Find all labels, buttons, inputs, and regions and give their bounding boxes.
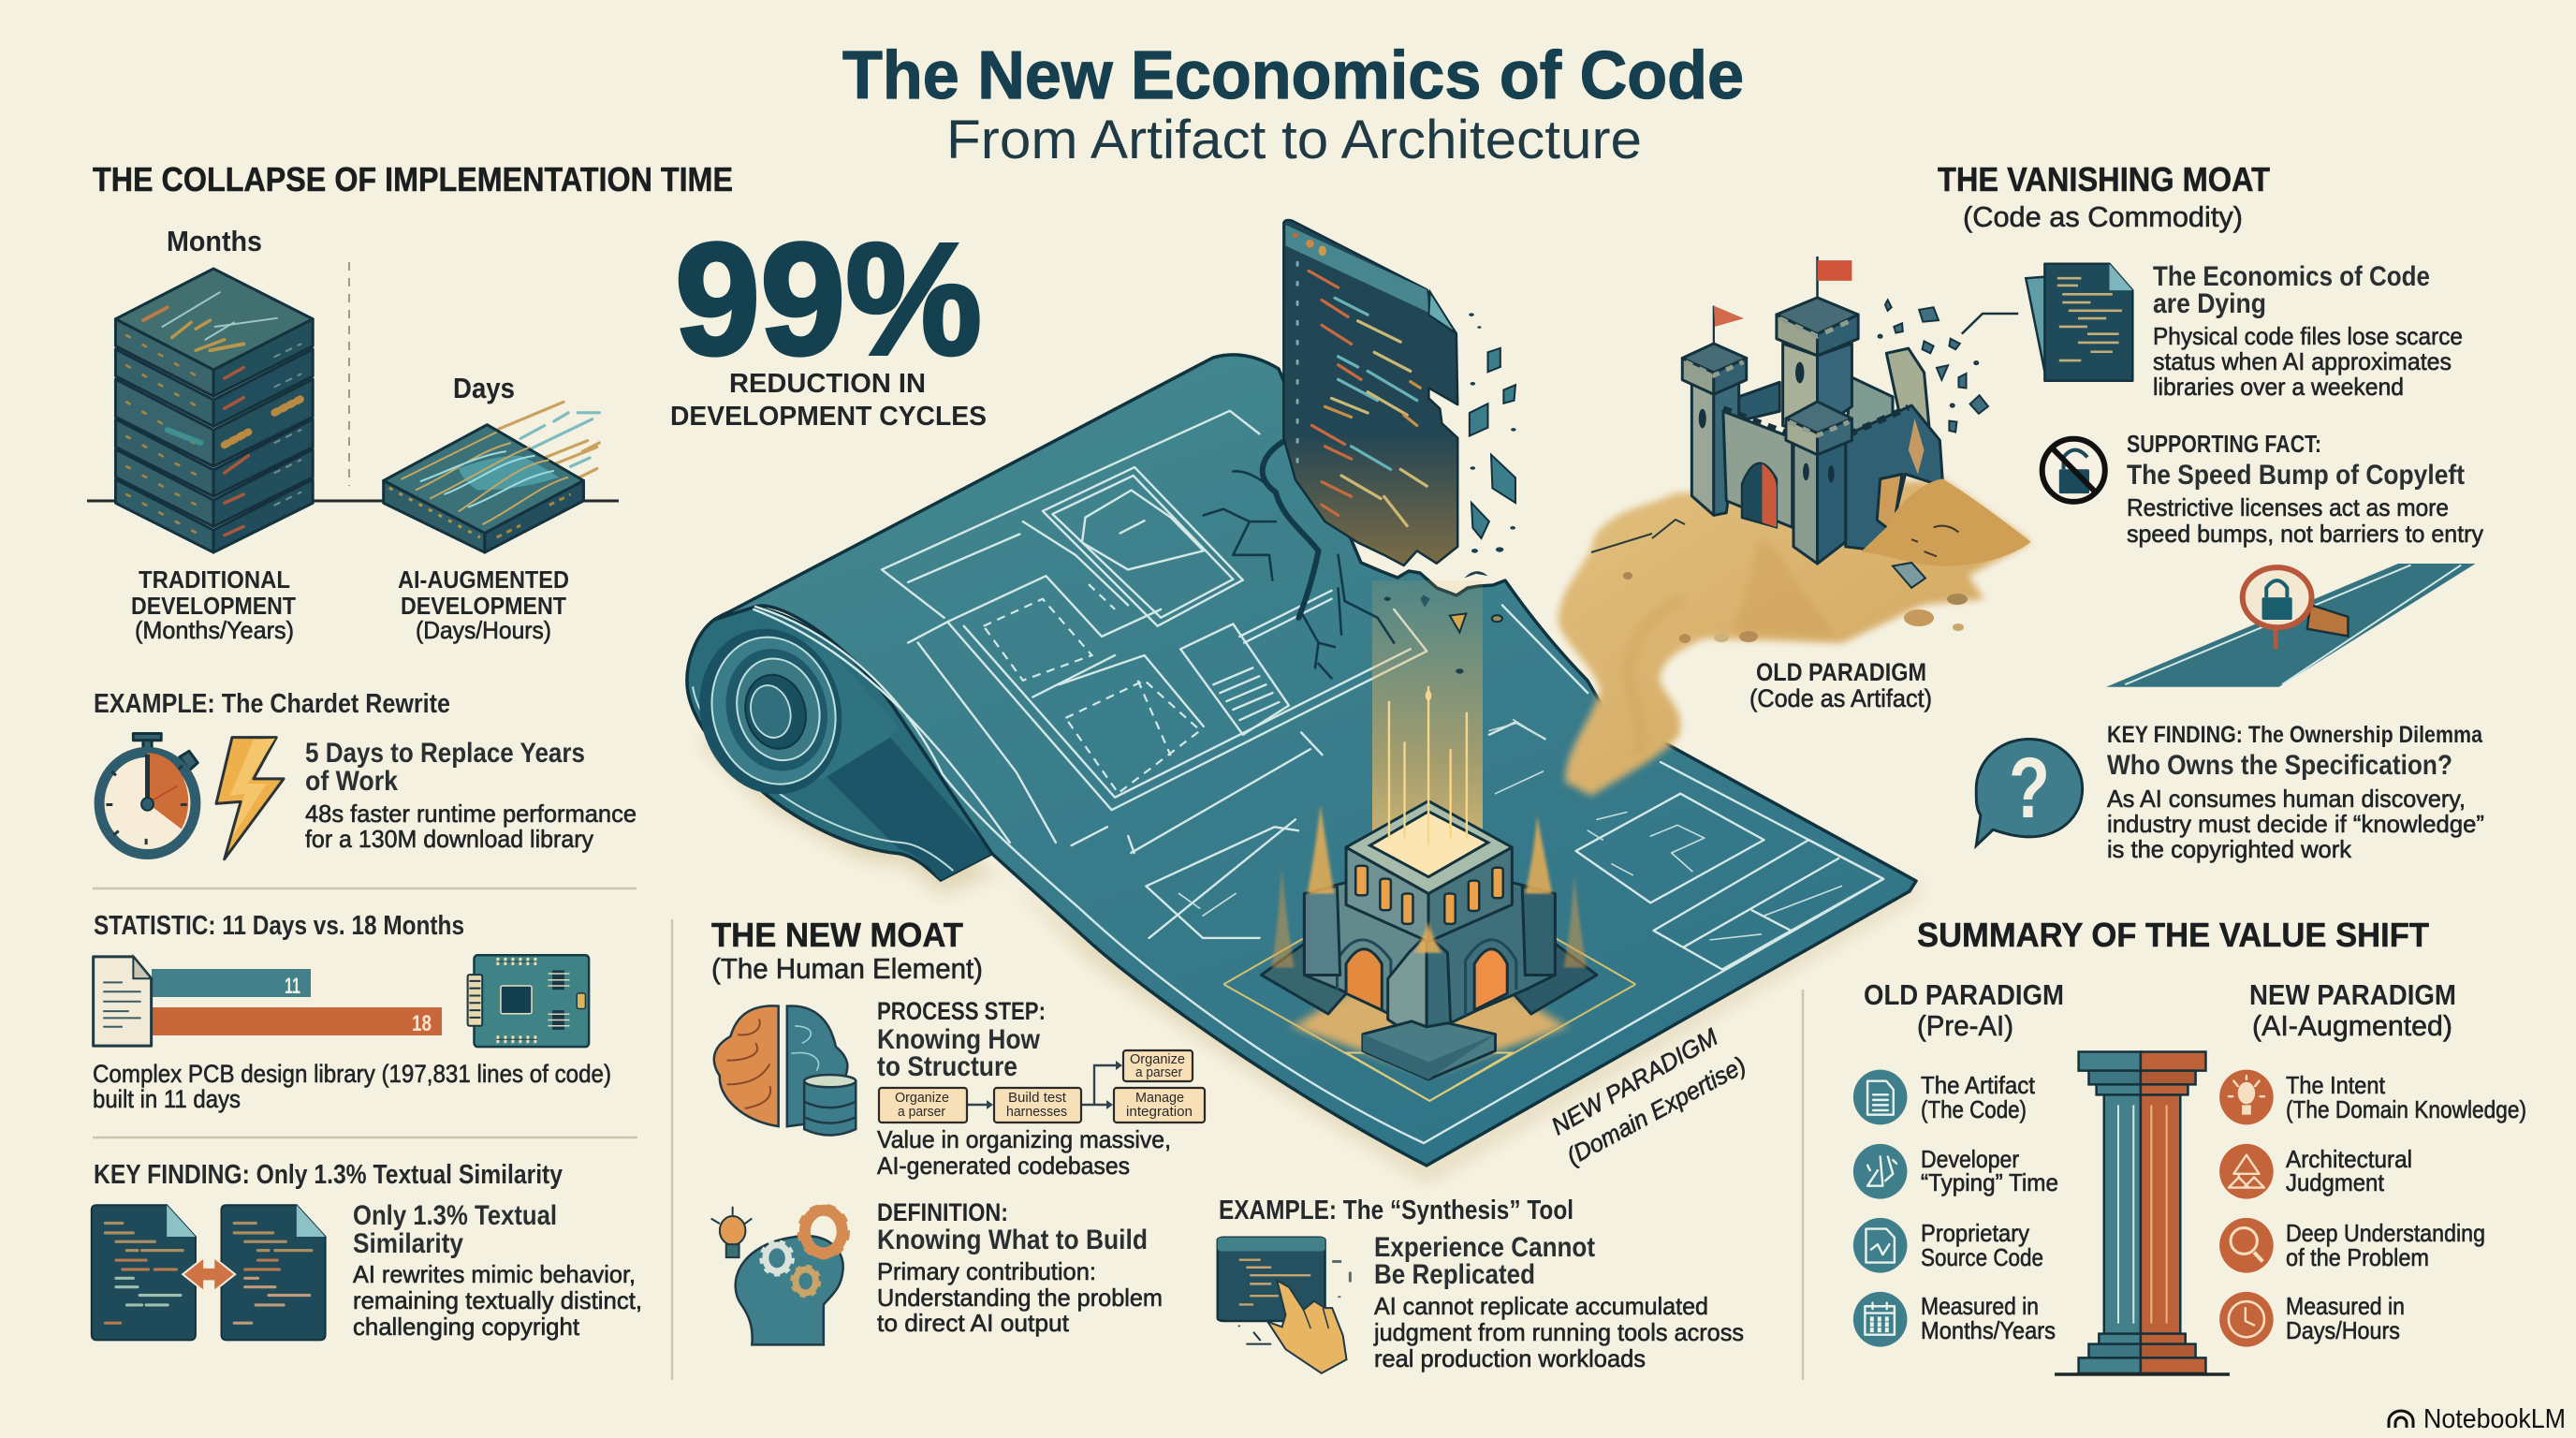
block: economics of code: Physical code files lose scarce [2153,322,2463,350]
falling stones [1879,300,1988,588]
block: synthesis tool example: judgment from running tools across [1373,1318,1744,1346]
flow diagram: a parser [898,1104,945,1120]
block: ownership dilemma: Who Owns the Specification? [2107,750,2452,781]
bar: 18 months: 18 [412,1011,432,1036]
label: traditional development: TRADITIONAL [139,565,290,594]
block: synthesis tool example: EXAMPLE: The “Synthesis” Tool [1219,1196,1573,1225]
item: architectural judgment: Judgment [2286,1168,2385,1196]
block: process step: Value in organizing massive, [877,1125,1171,1153]
bar: 11 days [152,969,311,999]
block: synthesis tool example: real production workloads [1374,1344,1646,1372]
central illustration: blueprint scroll [681,355,1919,1181]
right ruined wall [1846,405,1943,551]
finding text: AI rewrites mimic behavior, [353,1260,636,1288]
item: the artifact: The Artifact [1921,1071,2036,1099]
main title: The New Economics of Code [842,38,1744,113]
block: ownership dilemma: industry must decide if “knowledge” [2107,810,2484,838]
block: definition: Understanding the problem [877,1284,1163,1312]
finding text: Similarity [353,1228,463,1259]
block: synthesis tool example: AI cannot replicate accumulated [1374,1292,1708,1320]
statistic caption: Complex PCB design library (197,831 lines of code) [93,1060,611,1088]
item: developer typing time: Developer [1921,1145,2019,1173]
example text: 5 Days to Replace Years [305,738,585,769]
label: days: Days [453,372,515,404]
icon: code file [2026,264,2132,381]
central illustration: dissolving code document [1204,220,1516,679]
block: definition: Knowing What to Build [877,1225,1148,1255]
block: economics of code: status when AI approximates [2153,347,2452,375]
label: traditional development: DEVELOPMENT [131,592,296,620]
block: ownership dilemma: As AI consumes human discovery, [2107,785,2466,813]
panel: the new moat [711,916,1744,1373]
old paradigm column heading: OLD PARADIGM [1864,978,2064,1011]
sand spill from castle [1559,479,2031,796]
label: old paradigm [1749,658,1932,712]
item: the artifact: (The Code) [1921,1095,2027,1123]
label: traditional development [131,565,296,644]
finding text [353,1200,642,1341]
icon: two code files with arrow [92,1205,326,1340]
new paradigm column heading: NEW PARADIGM [2249,978,2456,1011]
code lines [1297,262,1427,526]
icon: question speech bubble [1976,740,2083,845]
bar chart [152,969,442,1036]
flow diagram: integration [1126,1104,1193,1120]
finding text: Only 1.3% Textual [353,1200,557,1231]
flow diagram [879,1050,1205,1123]
label: ai-augmented development: (Days/Hours) [416,616,551,644]
item: the artifact [1853,1070,2036,1124]
center keep [1777,257,1858,431]
new paradigm column heading [2249,978,2456,1042]
item: proprietary source code: Source Code [1921,1243,2043,1271]
block: process step: PROCESS STEP: [877,997,1046,1025]
item: deep understanding: of the Problem [2286,1243,2429,1271]
lower blueprint drawings [1072,720,1883,970]
item: deep understanding: Deep Understanding [2286,1219,2485,1247]
item: developer typing time: “Typing” Time [1921,1168,2058,1196]
label: ai-augmented development: AI-AUGMENTED [398,565,569,594]
item: measured in days/hours: Measured in [2286,1292,2405,1320]
block: synthesis tool example [1218,1196,1744,1373]
finding text: remaining textually distinct, [353,1286,642,1314]
example text: of Work [305,766,398,797]
icon: hand on code screen [1218,1238,1350,1373]
main blueprint sheet [714,355,1916,1166]
cracks in blueprint [1204,442,1394,679]
new moat heading: (The Human Element) [711,952,983,985]
item: developer typing time [1853,1144,2058,1199]
label: months: Months [167,225,262,257]
block: ownership dilemma [1976,722,2484,863]
block: synthesis tool example: Experience Cannot [1374,1232,1595,1263]
label: ai-augmented development: DEVELOPMENT [401,592,566,620]
icon: tall stack of code blocks [115,269,313,552]
icon: question speech bubble: ? [2009,741,2050,836]
block: speed bump of copyleft [2042,430,2483,548]
flow diagram: a parser [1135,1064,1182,1080]
floor plan drawing [754,411,1588,843]
label: ai-augmented development [398,565,569,644]
old paradigm column heading: (Pre-AI) [1917,1009,2013,1042]
icon: split column [2055,1051,2230,1374]
block: definition [877,1198,1163,1337]
item: measured in months/years: Measured in [1921,1292,2039,1320]
big statistic: 99 percent: DEVELOPMENT CYCLES [670,402,987,432]
icon: head with gears and bulb [711,1207,847,1344]
statistic heading: STATISTIC: 11 Days vs. 18 Months [94,911,464,941]
illustration: road with lock sign [2106,564,2476,687]
item: the intent: (The Domain Knowledge) [2286,1095,2526,1123]
left tower [1682,306,1747,515]
light beam [1372,580,1483,903]
flow diagram: Build test [1008,1090,1067,1106]
block: economics of code: are Dying [2153,288,2266,319]
block: ownership dilemma: is the copyrighted work [2107,835,2352,863]
panel: textual similarity finding [92,1160,642,1341]
item: proprietary source code: Proprietary [1921,1219,2029,1247]
icon: crossed-out lock [2042,439,2105,502]
block: ownership dilemma: KEY FINDING: The Ownership Dilemma [2107,722,2483,748]
bar: 18 months [152,1007,442,1036]
label: traditional development: (Months/Years) [135,616,294,644]
statistic caption [93,1060,611,1113]
illustration: crumbling castle [1682,257,2031,588]
item: proprietary source code [1853,1218,2043,1273]
item: architectural judgment: Architectural [2286,1145,2412,1173]
item: measured in months/years: Months/Years [1921,1316,2056,1344]
block: economics of code: libraries over a weekend [2153,373,2404,401]
item: the intent [2219,1070,2526,1124]
section heading: THE COLLAPSE OF IMPLEMENTATION TIME [93,160,733,198]
back walls [1739,382,1779,421]
old paradigm column heading [1864,978,2064,1042]
left wall with gate [1723,409,1793,527]
icon: document [94,957,152,1046]
panel: collapse of implementation time [87,160,733,644]
panel: chardet rewrite example [94,689,637,859]
old paradigm list [1853,1070,2058,1347]
flow diagram: harnesses [1006,1104,1067,1120]
statistic caption: built in 11 days [93,1085,241,1113]
document header [1285,225,1428,313]
sheet border lines [755,607,1883,1143]
flow diagram: Organize [895,1090,949,1106]
big statistic: 99 percent: 99% [675,211,982,389]
label: old paradigm: OLD PARADIGM [1756,658,1926,686]
moat heading: (Code as Commodity) [1963,200,2243,233]
watermark: NotebookLM: NotebookLM [2423,1404,2566,1434]
central illustration: glowing tower [1223,580,1635,1101]
block: process step: to Structure [877,1051,1017,1082]
icon: brain and database [714,1005,856,1136]
block: speed bump of copyleft: SUPPORTING FACT: [2127,430,2321,458]
bar: 11 days: 11 [285,974,300,999]
panel: 11 days versus 18 months statistic [93,911,611,1113]
new moat heading: THE NEW MOAT [711,916,963,954]
roll of blueprint [681,607,992,880]
big statistic: 99 percent: REDUCTION IN [729,369,926,399]
icon: circuit board [468,955,589,1047]
title block [842,38,1744,170]
example heading: EXAMPLE: The Chardet Rewrite [94,689,450,719]
new moat heading [711,916,983,985]
block: speed bump of copyleft: The Speed Bump of Copyleft [2127,460,2465,491]
icon: lightning bolt [216,738,284,859]
example text: 48s faster runtime performance [305,800,637,828]
icon: stopwatch [99,733,198,855]
icon: NotebookLM logo [2389,1411,2413,1428]
item: measured in days/hours [2219,1292,2405,1347]
flying debris [1470,348,1515,538]
item: deep understanding [2219,1218,2485,1273]
block: definition: to direct AI output [877,1309,1070,1337]
label: new paradigm domain expertise: NEW PARADIGM [1546,1022,1722,1140]
icon: flat compressed code slab [384,402,599,552]
label: old paradigm: (Code as Artifact) [1749,684,1932,712]
right code file [221,1205,326,1340]
new paradigm list [2219,1070,2526,1347]
block: economics of code [2026,261,2463,401]
block: speed bump of copyleft: speed bumps, not barriers to entry [2127,520,2483,548]
paper shadow [697,730,1919,1181]
summary heading: SUMMARY OF THE VALUE SHIFT [1917,916,2429,954]
moat heading: THE VANISHING MOAT [1938,160,2270,198]
label: new paradigm domain expertise: (Domain Expertise) [1562,1050,1750,1170]
block: process step: AI-generated codebases [877,1152,1130,1180]
flow diagram: Organize [1130,1051,1185,1067]
block: speed bump of copyleft: Restrictive licenses act as more [2127,493,2449,521]
flow diagram: Manage [1135,1090,1184,1106]
item: architectural judgment [2219,1144,2412,1199]
block: process step [877,997,1205,1180]
block: definition: DEFINITION: [877,1198,1008,1226]
example text [305,738,637,853]
panel: summary of the value shift [1853,916,2526,1374]
new paradigm column heading: (AI-Augmented) [2252,1009,2452,1042]
code document page [1283,220,1457,565]
panel: vanishing moat [1682,160,2484,863]
item: the intent: The Intent [2286,1071,2386,1099]
block: synthesis tool example: Be Replicated [1374,1259,1535,1290]
block: economics of code: The Economics of Code [2153,261,2430,292]
finding text: challenging copyright [353,1313,580,1341]
moat heading [1938,160,2270,233]
floor glow [1223,938,1635,1101]
block: definition: Primary contribution: [877,1257,1096,1285]
double arrow [183,1257,235,1291]
flames and rays [1271,686,1587,968]
foreground sand at castle base [1861,479,2031,566]
tower building [1261,801,1597,1079]
finding heading: KEY FINDING: Only 1.3% Textual Similarity [94,1160,563,1190]
subtitle: From Artifact to Architecture [946,110,1642,170]
example text: for a 130M download library [305,825,593,853]
item: measured in days/hours: Days/Hours [2286,1316,2400,1344]
front tower [1786,402,1852,564]
item: measured in months/years [1853,1292,2056,1347]
block: process step: Knowing How [877,1024,1041,1055]
left code file [92,1205,196,1340]
